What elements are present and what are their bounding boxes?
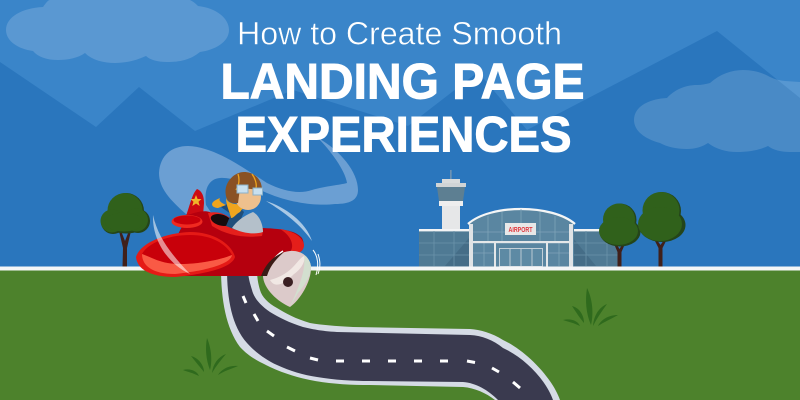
- tail star: [190, 195, 202, 206]
- airport: [419, 170, 619, 267]
- grass tuft: right: [563, 288, 618, 326]
- tree: middle: [599, 204, 640, 267]
- road: [221, 268, 560, 400]
- cloud: top left: [6, 0, 229, 63]
- main wing: [136, 232, 235, 277]
- road centre dashes: [243, 296, 520, 388]
- cloud: top right: [634, 70, 800, 152]
- sky background: [0, 0, 800, 270]
- white blade left: [153, 215, 190, 274]
- cockpit rim: [208, 212, 263, 237]
- smoke swirl trail: [159, 138, 358, 214]
- tailplane: [172, 215, 202, 236]
- grass tuft: left: [183, 338, 238, 376]
- mountains: [0, 31, 800, 270]
- title line 3: EXPERIENCES: [236, 106, 572, 163]
- white blade right: [266, 201, 312, 241]
- title: [220, 16, 584, 163]
- engine cowl edge: [261, 252, 284, 276]
- motion lines: [313, 250, 320, 275]
- goggles: [237, 185, 262, 195]
- tail fin: [186, 189, 204, 216]
- propeller blur disc: [263, 251, 311, 307]
- grass field: [0, 270, 800, 400]
- ground line: [0, 266, 800, 270]
- windshield: [232, 212, 263, 233]
- left wing building: [419, 229, 470, 267]
- nose highlight band: [280, 229, 304, 254]
- control tower: [436, 170, 466, 230]
- tree: left: [100, 193, 150, 267]
- airplane with pilot: [136, 172, 320, 307]
- pilot head: [225, 172, 262, 210]
- road edge: [221, 268, 560, 400]
- title line 2: LANDING PAGE: [220, 53, 584, 110]
- fuselage: [175, 211, 304, 276]
- propeller hub: [283, 277, 293, 287]
- tree: right: [638, 192, 686, 267]
- airport sign: AIRPORT: [508, 227, 533, 234]
- road asphalt: [227, 268, 553, 400]
- title line 1: How to Create Smooth: [237, 16, 562, 52]
- pilot body and scarf: [212, 198, 246, 230]
- cockpit opening: [209, 212, 233, 228]
- entrance doors: [500, 248, 542, 267]
- right wing building: [572, 229, 619, 267]
- main terminal hall: [468, 209, 575, 267]
